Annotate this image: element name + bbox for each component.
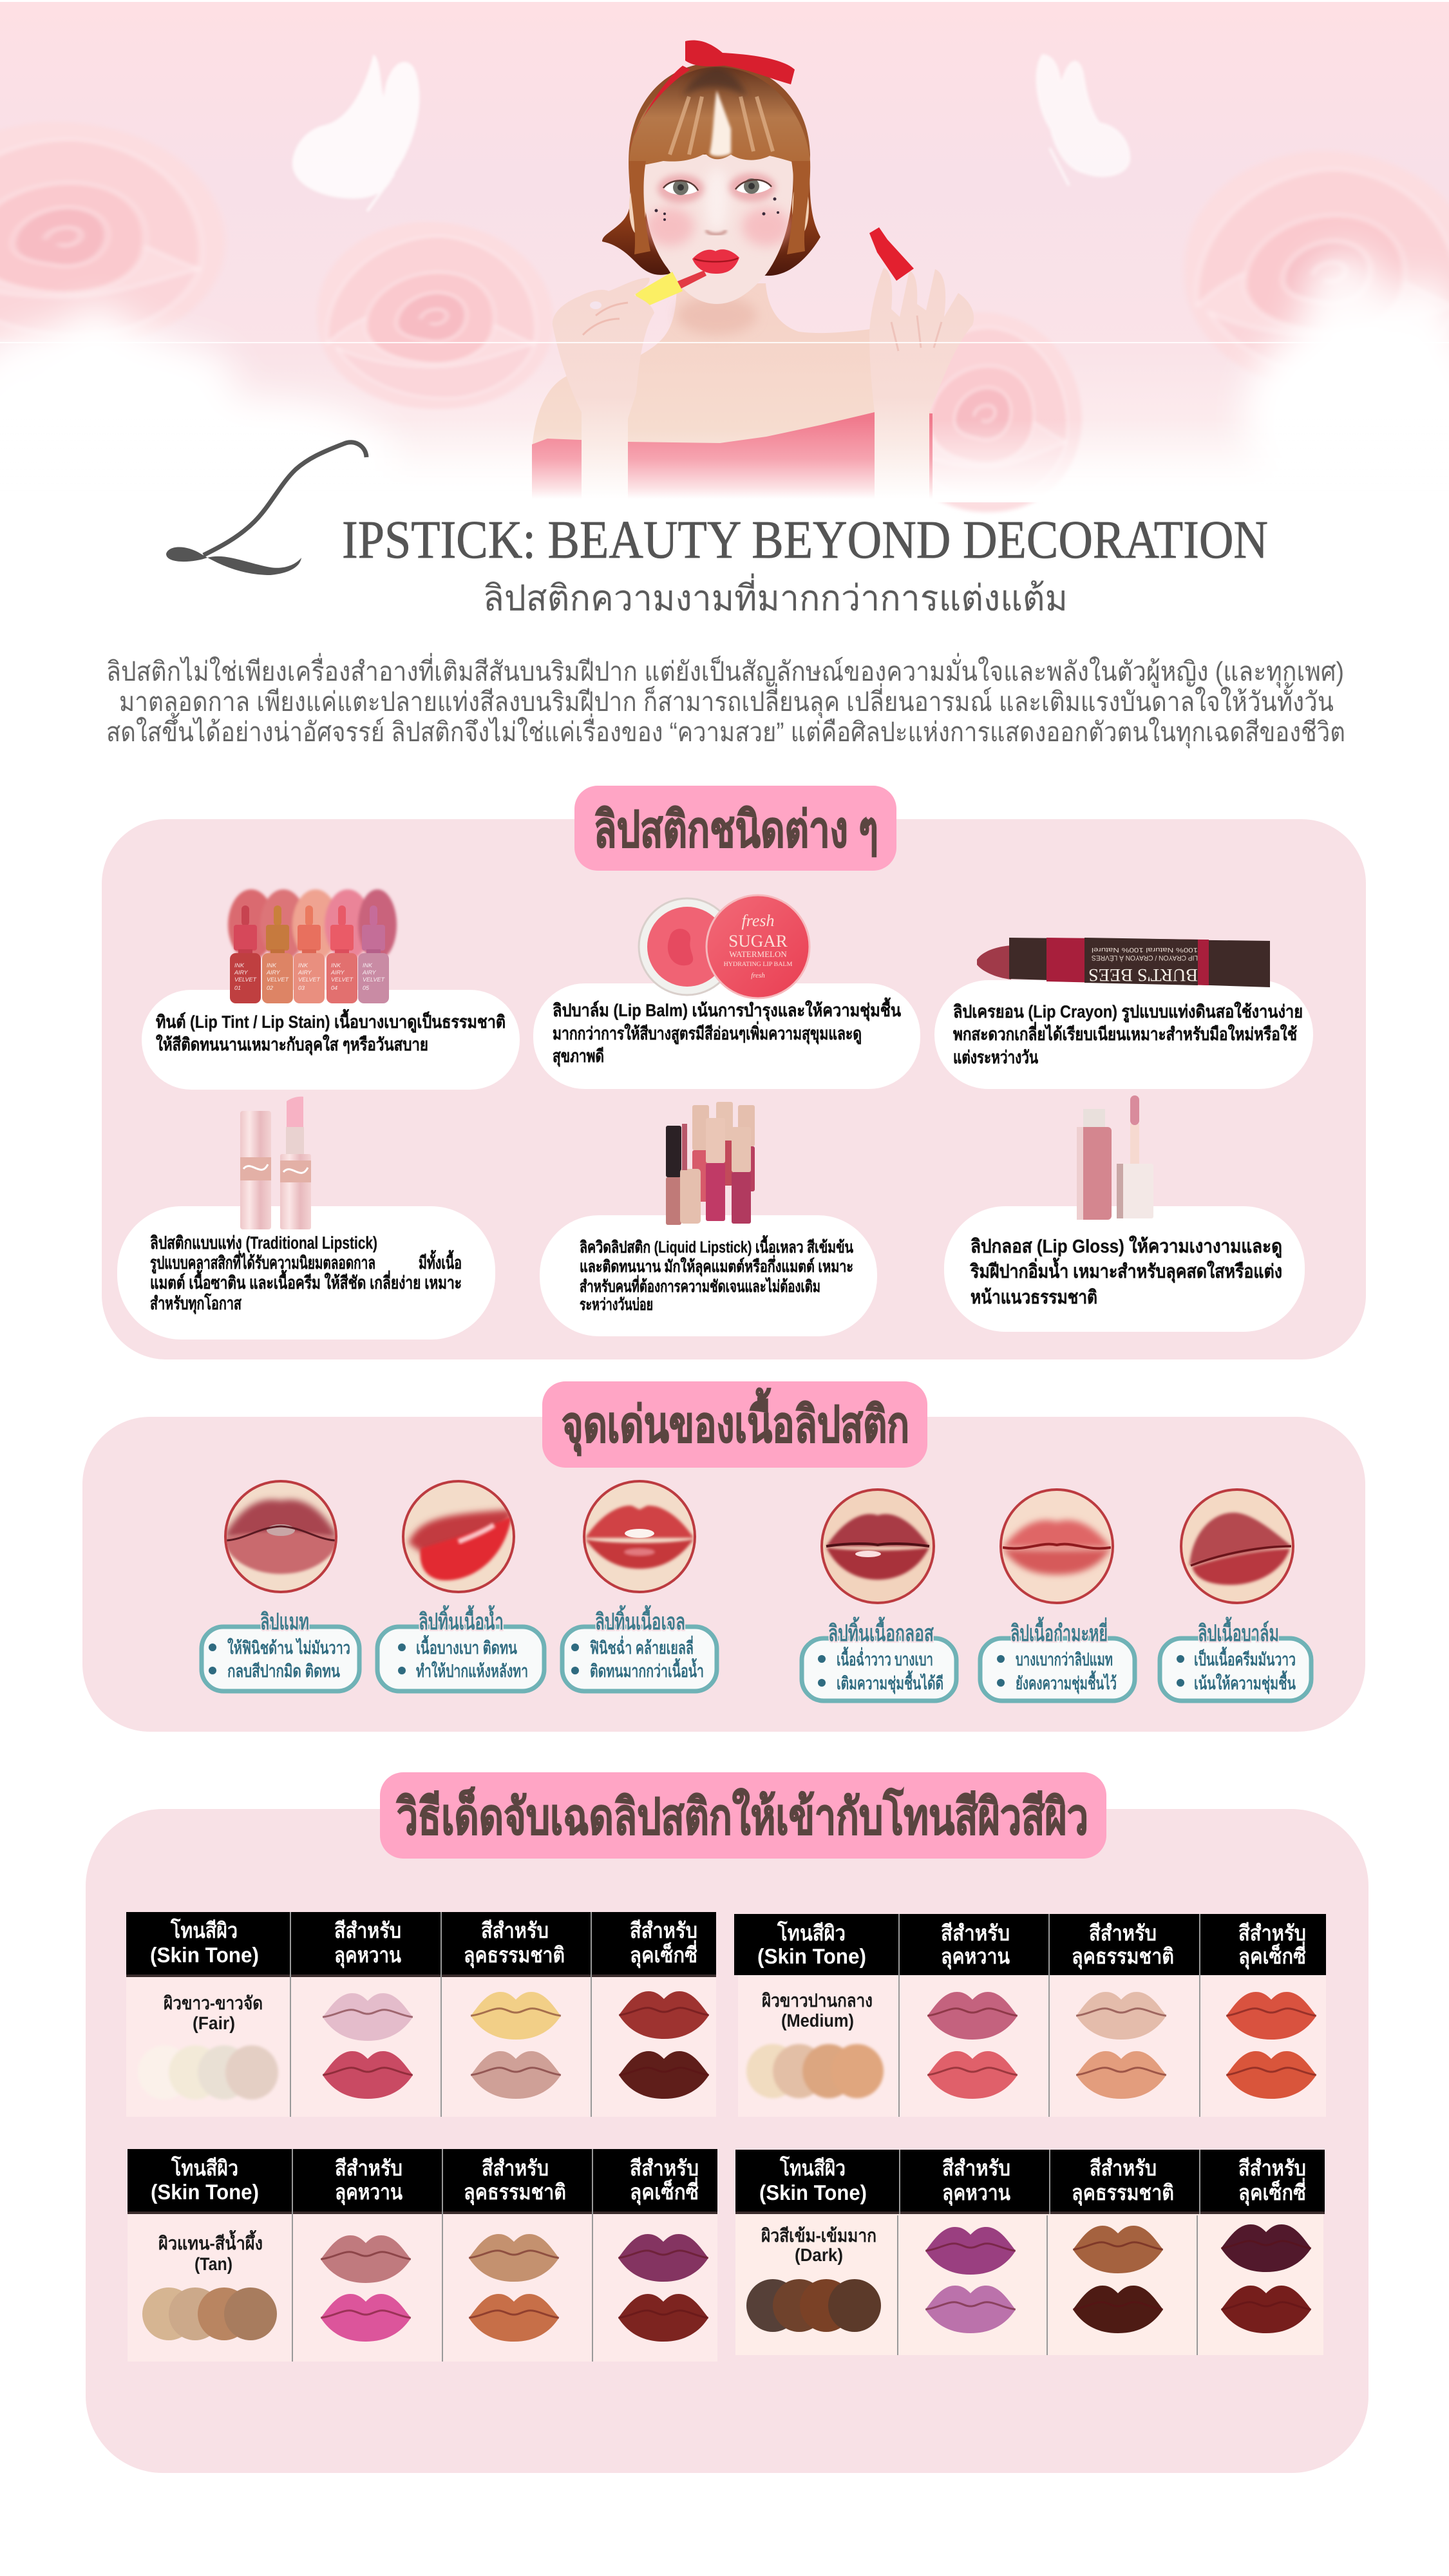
table: medium skin: สีสำหรับ	[1089, 1921, 1157, 1945]
card: lip gloss: ริมฝีปากอิ่มน้ำ เหมาะสำหรับลุคสดใสหรือแต่ง	[970, 1257, 1282, 1283]
product: traditional lipstick	[240, 1097, 311, 1229]
product: lip balm jar: SUGAR	[728, 931, 788, 951]
table: medium skin	[734, 1914, 1326, 2117]
nose	[706, 231, 726, 234]
product: lip tint bottles: VELVET	[363, 976, 386, 983]
table: medium skin: โทนสีผิว	[777, 1920, 846, 1945]
product: liquid lipsticks	[666, 1102, 755, 1225]
table: tan skin: สีสำหรับ	[335, 2156, 402, 2180]
rose: left	[0, 122, 225, 348]
title text: IPSTICK: BEAUTY BEYOND DECORATION	[342, 510, 1268, 570]
back hair	[602, 62, 820, 276]
table: dark skin: สีสำหรับ	[1238, 2156, 1306, 2180]
product: lip tint bottles: 04	[331, 985, 337, 991]
product: lip tint bottles: AIRY	[362, 969, 377, 976]
skin swatches: fair	[138, 2045, 278, 2099]
table: dark skin: ลุคธรรมชาติ	[1072, 2181, 1174, 2206]
callout: gel tint: ฟินิชฉ่ำ คล้ายเยลลี่	[590, 1635, 694, 1658]
product: lip tint bottles: INK	[363, 962, 373, 969]
table: medium skin: สีสำหรับ	[1238, 1921, 1306, 1945]
product: lip tint bottles: 02	[267, 985, 273, 991]
product: lip tint bottles: VELVET	[298, 976, 321, 983]
product: lip tint bottles: 01	[234, 985, 241, 991]
lips: balm	[1181, 1490, 1293, 1603]
subtitle: ลิปสติกความงามที่มากกว่าการแต่งแต้ม	[483, 573, 1068, 618]
lips: velvet	[1001, 1490, 1113, 1603]
table: tan skin: ลุคเซ็กซี่	[630, 2177, 699, 2206]
butterfly left	[292, 54, 420, 211]
card: lip balm: สุขภาพดี	[553, 1046, 604, 1067]
table: dark skin: ผิวสีเข้ม-เข้มมาก	[761, 2226, 876, 2246]
callout: matte: กลบสีปากมิด ติดทน	[227, 1662, 340, 1681]
card: lip tint: ทินต์ (Lip Tint / Lip Stain) เนื้อบางเบาดูเป็นธรรมชาติ	[156, 1009, 506, 1033]
card: lip crayon: ลิปเครยอน (Lip Crayon) รูปแบบแท่งดินสอใช้งานง่าย	[953, 1001, 1303, 1023]
card: lip balm	[533, 983, 920, 1089]
heading: lipstick types	[574, 786, 896, 871]
callout: gloss tint: ลิปทิ้นเนื้อกลอส	[828, 1616, 934, 1646]
card: lip gloss: หน้าแนวธรรมชาติ	[971, 1287, 1097, 1308]
product: lip tint bottles: 05	[363, 985, 370, 991]
table: medium skin: ลุคธรรมชาติ	[1072, 1944, 1174, 1970]
product: lip tint bottles: VELVET	[234, 976, 258, 983]
product: lip crayon	[977, 938, 1270, 987]
card: lip balm: มากกว่าการให้สีบางสูตรมีสีอ่อนๆเพิ่มความสุขุมและดู	[553, 1021, 862, 1045]
heading: texture highlights: จุดเด่นของเนื้อลิปสติก	[562, 1388, 909, 1456]
product: lip crayon: LIP CRAYON / CRAYON À LÈVRES	[1092, 954, 1198, 962]
card: lip tint: ให้สีติดทนนานเหมาะกับลุคใส ๆหรือวันสบาย	[156, 1034, 428, 1056]
right hand	[869, 268, 974, 502]
product: lip balm jar	[639, 895, 810, 998]
heading: lipstick types: ลิปสติกชนิดต่าง ๆ	[594, 801, 878, 858]
title	[166, 442, 1268, 575]
card: liquid lipstick: ลิควิดลิปสติก (Liquid Lipstick) เนื้อเหลว สีเข้มข้น	[580, 1235, 853, 1256]
lip swatches: fair	[323, 1991, 709, 2099]
lips	[692, 249, 739, 274]
table: dark skin: (Dark)	[795, 2245, 843, 2265]
table: dark skin: สีสำหรับ	[1090, 2156, 1157, 2180]
lipstick: red bottle	[869, 227, 914, 281]
callout: water tint	[377, 1605, 544, 1691]
table: medium skin: (Skin Tone)	[757, 1944, 866, 1968]
card: lip crayon: แต่งระหว่างวัน	[953, 1048, 1038, 1067]
clouds	[0, 251, 1449, 541]
table: fair skin: ลุคธรรมชาติ	[464, 1943, 565, 1969]
table: fair skin: สีสำหรับ	[334, 1918, 401, 1942]
table: fair skin: โทนสีผิว	[170, 1918, 238, 1942]
callout: balm	[1160, 1616, 1311, 1701]
product: lip tint bottles: INK	[298, 962, 308, 969]
heading: texture highlights	[542, 1381, 927, 1468]
heading: shade matching: วิธีเด็ดจับเฉดลิปสติกให้เข้ากับโทนสีผิวสีผิว	[396, 1786, 1088, 1845]
side locks	[629, 161, 650, 254]
table: medium skin: ผิวขาวปานกลาง	[761, 1991, 873, 2011]
card: liquid lipstick	[540, 1215, 877, 1336]
model photo	[532, 41, 974, 502]
callout: velvet: ยังคงความชุ่มชื้นไว้	[1016, 1670, 1117, 1694]
lipstick: yellow	[635, 270, 706, 308]
product: lip balm jar: fresh	[741, 911, 775, 930]
card: traditional lipstick: สำหรับทุกโอกาส	[150, 1293, 242, 1314]
callout: gloss tint: เติมความชุ่มชื้นได้ดี	[837, 1670, 943, 1694]
table: medium skin: (Medium)	[781, 2011, 854, 2031]
product: lip balm jar: HYDRATING LIP BALM	[724, 961, 793, 968]
lips: gel tint	[584, 1481, 695, 1592]
table: fair skin: (Skin Tone)	[150, 1943, 259, 1967]
table: dark skin: (Skin Tone)	[759, 2181, 867, 2204]
card: lip tint	[142, 990, 520, 1090]
hero illustration	[0, 2, 1449, 541]
rose: behind model	[890, 312, 1082, 512]
callout: balm: ลิปเนื้อบาล์ม	[1198, 1616, 1279, 1646]
product: lip tint bottles: 03	[298, 985, 305, 991]
callout: matte	[202, 1609, 359, 1691]
table: fair skin: สีสำหรับ	[630, 1918, 697, 1942]
callout: gel tint: ลิปทิ้นเนื้อเจล	[595, 1605, 685, 1634]
card: liquid lipstick: ระหว่างวันบ่อย	[580, 1296, 653, 1314]
product: lip tint bottles: AIRY	[266, 969, 281, 976]
left hand	[553, 278, 654, 502]
lip swatches: medium	[927, 1992, 1316, 2099]
table: tan skin: (Tan)	[194, 2254, 232, 2274]
hero hairline	[0, 342, 1449, 343]
card: traditional lipstick	[117, 1206, 495, 1340]
product: lip tint bottles: VELVET	[331, 976, 354, 983]
table: dark skin: สีสำหรับ	[942, 2156, 1010, 2180]
product: lip tint bottles: AIRY	[330, 969, 345, 976]
card: liquid lipstick: สำหรับคนที่ต้องการความชัดเจนและไม่ต้องเติม	[580, 1274, 820, 1296]
panel: shade matching	[86, 1772, 1368, 2473]
callout: matte: ลิปแมท	[260, 1609, 309, 1634]
table: fair skin	[126, 1912, 716, 2117]
table: medium skin: ลุคเซ็กซี่	[1238, 1941, 1306, 1970]
table: dark skin: ลุคหวาน	[942, 2181, 1010, 2206]
decorative capital L	[166, 442, 366, 575]
product: lip crayon: 100% Natural 100% Naturel	[1092, 946, 1198, 953]
card: traditional lipstick: รูปแบบคลาสสิกที่ได้รับความนิยมตลอดกาล	[150, 1250, 375, 1274]
table: tan skin: โทนสีผิว	[171, 2155, 238, 2180]
table: medium skin: สีสำหรับ	[941, 1921, 1010, 1945]
callout: gel tint: ติดทนมากกว่าเนื้อน้ำ	[590, 1658, 704, 1681]
ears	[629, 180, 646, 234]
product: lip crayon: BURT'S BEES	[1088, 965, 1198, 985]
table: dark skin: ลุคเซ็กซี่	[1238, 2177, 1306, 2206]
card: lip gloss	[944, 1206, 1305, 1332]
table: tan skin: ผิวแทน-สีน้ำผึ้ง	[158, 2230, 263, 2253]
callout: velvet: บางเบากว่าลิปแมท	[1016, 1650, 1113, 1669]
panel: lipstick types	[102, 786, 1366, 1359]
callout: water tint: เนื้อบางเบา ติดทน	[416, 1634, 517, 1658]
lips: water tint	[403, 1481, 514, 1592]
callout: gloss tint: เนื้อฉ่ำวาว บางเบา	[837, 1646, 933, 1669]
skin swatches: medium	[746, 2044, 884, 2098]
callout: balm: เน้นให้ความชุ่มชื้น	[1194, 1670, 1296, 1694]
callout: water tint: ทำให้ปากแห้งหลังทา	[416, 1661, 528, 1681]
product: lip tint bottles: AIRY	[234, 969, 249, 976]
callout: gloss tint	[802, 1616, 956, 1701]
skin swatches: tan	[142, 2287, 277, 2340]
bangs	[629, 67, 810, 166]
lips: gloss tint	[822, 1490, 934, 1603]
heading: shade matching	[380, 1772, 1106, 1859]
product: lip tint bottles	[228, 889, 397, 1003]
table: fair skin: ผิวขาว-ขาวจัด	[163, 1993, 263, 2013]
table: tan skin: สีสำหรับ	[630, 2156, 699, 2180]
lip swatches: tan	[321, 2234, 708, 2342]
table: tan skin: สีสำหรับ	[482, 2156, 549, 2180]
callout: matte: ให้ฟินิชด้าน ไม่มันวาว	[227, 1638, 350, 1658]
freckles	[654, 197, 779, 221]
callout: water tint: ลิปทิ้นเนื้อน้ำ	[419, 1605, 504, 1634]
butterfly right	[1036, 54, 1130, 185]
rose: middle	[317, 222, 554, 409]
table: tan skin: ลุคหวาน	[335, 2180, 402, 2206]
table: tan skin: (Skin Tone)	[151, 2180, 259, 2204]
card: traditional lipstick: ลิปสติกแบบแท่ง (Traditional Lipstick)	[150, 1233, 377, 1253]
table: dark skin	[735, 2150, 1325, 2355]
lip swatches: dark	[925, 2224, 1311, 2333]
table: fair skin: ลุคหวาน	[334, 1943, 401, 1969]
product: lip tint bottles: VELVET	[267, 976, 290, 983]
neck shadow	[677, 296, 757, 335]
callout: gel tint	[562, 1605, 717, 1691]
callout: balm: เป็นเนื้อครีมมันวาว	[1194, 1646, 1296, 1669]
intro paragraph	[106, 652, 1345, 748]
table: medium skin: ลุคหวาน	[941, 1944, 1010, 1970]
table: fair skin: สีสำหรับ	[481, 1918, 549, 1942]
panel: texture highlights	[82, 1381, 1365, 1732]
callout: velvet	[980, 1616, 1135, 1701]
table: fair skin: (Fair)	[193, 2013, 235, 2033]
bow	[629, 41, 795, 149]
card: lip crayon	[934, 980, 1313, 1089]
product: lip tint bottles: INK	[234, 962, 245, 969]
lips: matte	[223, 1481, 339, 1592]
card: traditional lipstick: มีทั้งเนื้อ	[419, 1249, 462, 1273]
torso	[532, 283, 933, 502]
table: fair skin: ลุคเซ็กซี่	[630, 1940, 697, 1969]
table: dark skin: โทนสีผิว	[779, 2155, 846, 2180]
rose: right	[1184, 151, 1449, 390]
callout: velvet: ลิปเนื้อกำมะหยี่	[1010, 1616, 1108, 1646]
card: liquid lipstick: และติดทนนาน มักให้ลุคแมตต์หรือกึ่งแมตต์ เหมาะ	[580, 1255, 853, 1276]
product: lip tint bottles: INK	[267, 962, 277, 969]
product: lip tint bottles: AIRY	[298, 969, 312, 976]
product: lip tint bottles: INK	[331, 962, 341, 969]
product: lip gloss	[1077, 1095, 1153, 1220]
eye left	[658, 175, 704, 203]
table: tan skin: ลุคธรรมชาติ	[464, 2180, 566, 2206]
eye right	[729, 173, 775, 202]
face	[643, 155, 793, 304]
card: lip gloss: ลิปกลอส (Lip Gloss) ให้ความเงางามและดู	[971, 1235, 1282, 1258]
product: lip balm jar: fresh	[751, 972, 765, 980]
table: tan skin	[128, 2149, 717, 2362]
card: traditional lipstick: แมตต์ เนื้อซาติน และเนื้อครีม ให้สีชัด เกลี่ยง่าย เหมาะ	[150, 1269, 462, 1293]
blush	[645, 207, 694, 246]
card: lip balm: ลิปบาล์ม (Lip Balm) เน้นการบำรุงและให้ความชุ่มชื้น	[553, 997, 901, 1021]
card: lip crayon: พกสะดวกเกลี่ยได้เรียบเนียนเหมาะสำหรับมือใหม่หรือใช้	[953, 1021, 1297, 1044]
pink top	[532, 412, 933, 502]
skin swatches: dark	[746, 2279, 881, 2332]
product: lip balm jar: WATERMELON	[729, 949, 787, 959]
